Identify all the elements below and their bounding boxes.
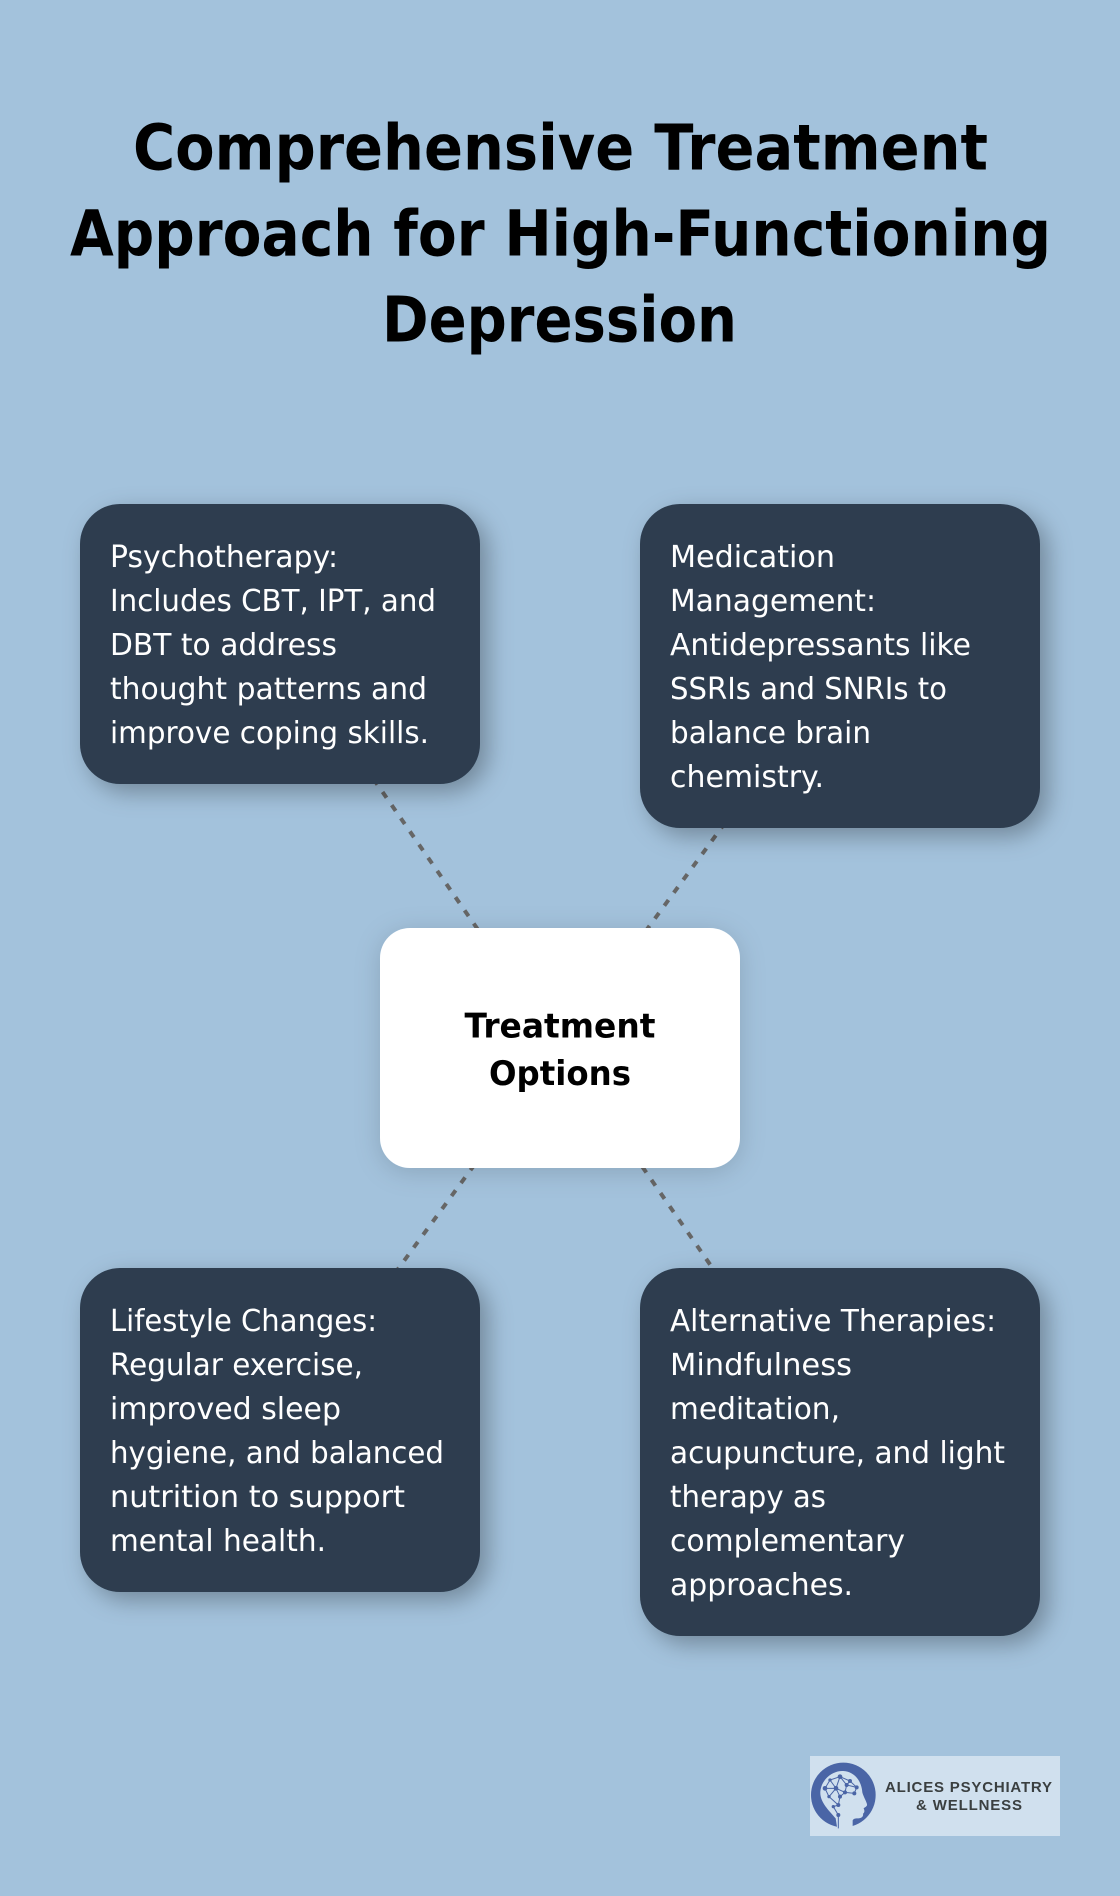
- panel: lifestyle changes: Lifestyle Changes:: [110, 1304, 377, 1339]
- panel: psychotherapy: Psychotherapy:: [110, 540, 338, 575]
- panel: lifestyle changes: nutrition to support: [110, 1480, 405, 1515]
- panel: medication management: Antidepressants like: [670, 628, 971, 663]
- panel: psychotherapy: thought patterns and: [110, 672, 427, 707]
- logo text: & WELLNESS: [916, 1797, 1022, 1814]
- panel: psychotherapy: DBT to address: [110, 628, 337, 663]
- panel: medication management: chemistry.: [670, 760, 824, 795]
- panel: psychotherapy: [80, 504, 480, 784]
- panel: medication management: [640, 504, 1040, 828]
- connector: medication to center: [560, 666, 840, 1048]
- panel: lifestyle changes: mental health.: [110, 1524, 326, 1559]
- panel: alternative therapies: approaches.: [670, 1568, 853, 1603]
- panel: alternative therapies: [640, 1268, 1040, 1636]
- logo: [810, 1756, 1060, 1836]
- panel: lifestyle changes: hygiene, and balanced: [110, 1436, 444, 1471]
- panel: psychotherapy: Includes CBT, IPT, and: [110, 584, 436, 619]
- panel: lifestyle changes: Regular exercise,: [110, 1348, 363, 1383]
- panel: alternative therapies: therapy as: [670, 1480, 826, 1515]
- panel: alternative therapies: complementary: [670, 1524, 905, 1559]
- panel: alternative therapies: acupuncture, and light: [670, 1436, 1005, 1471]
- panel: alternative therapies: Mindfulness: [670, 1348, 852, 1383]
- panel: lifestyle changes: [80, 1268, 480, 1592]
- panel: alternative therapies: Alternative Therapies:: [670, 1304, 996, 1339]
- title: Comprehensive Treatment: [133, 112, 988, 184]
- logo text: [885, 1779, 1052, 1814]
- panel: lifestyle changes: improved sleep: [110, 1392, 341, 1427]
- icon: head with brain network: [811, 1763, 876, 1829]
- panel: treatment options center: Options: [489, 1054, 631, 1094]
- connector: psychotherapy to center: [280, 644, 560, 1048]
- connector: lifestyle to center: [280, 1048, 560, 1430]
- connector: alternative therapies to center: [560, 1048, 840, 1452]
- panel: medication management: Management:: [670, 584, 876, 619]
- logo text: ALICES PSYCHIATRY: [885, 1779, 1052, 1796]
- title: Depression: [382, 284, 737, 356]
- panel: medication management: SSRIs and SNRIs to: [670, 672, 947, 707]
- title: [70, 112, 1051, 356]
- panel: medication management: balance brain: [670, 716, 871, 751]
- panel: medication management: Medication: [670, 540, 835, 575]
- panel: psychotherapy: improve coping skills.: [110, 716, 429, 751]
- panel: alternative therapies: meditation,: [670, 1392, 840, 1427]
- panel: treatment options center: [380, 928, 740, 1168]
- panel: treatment options center: Treatment: [464, 1006, 656, 1046]
